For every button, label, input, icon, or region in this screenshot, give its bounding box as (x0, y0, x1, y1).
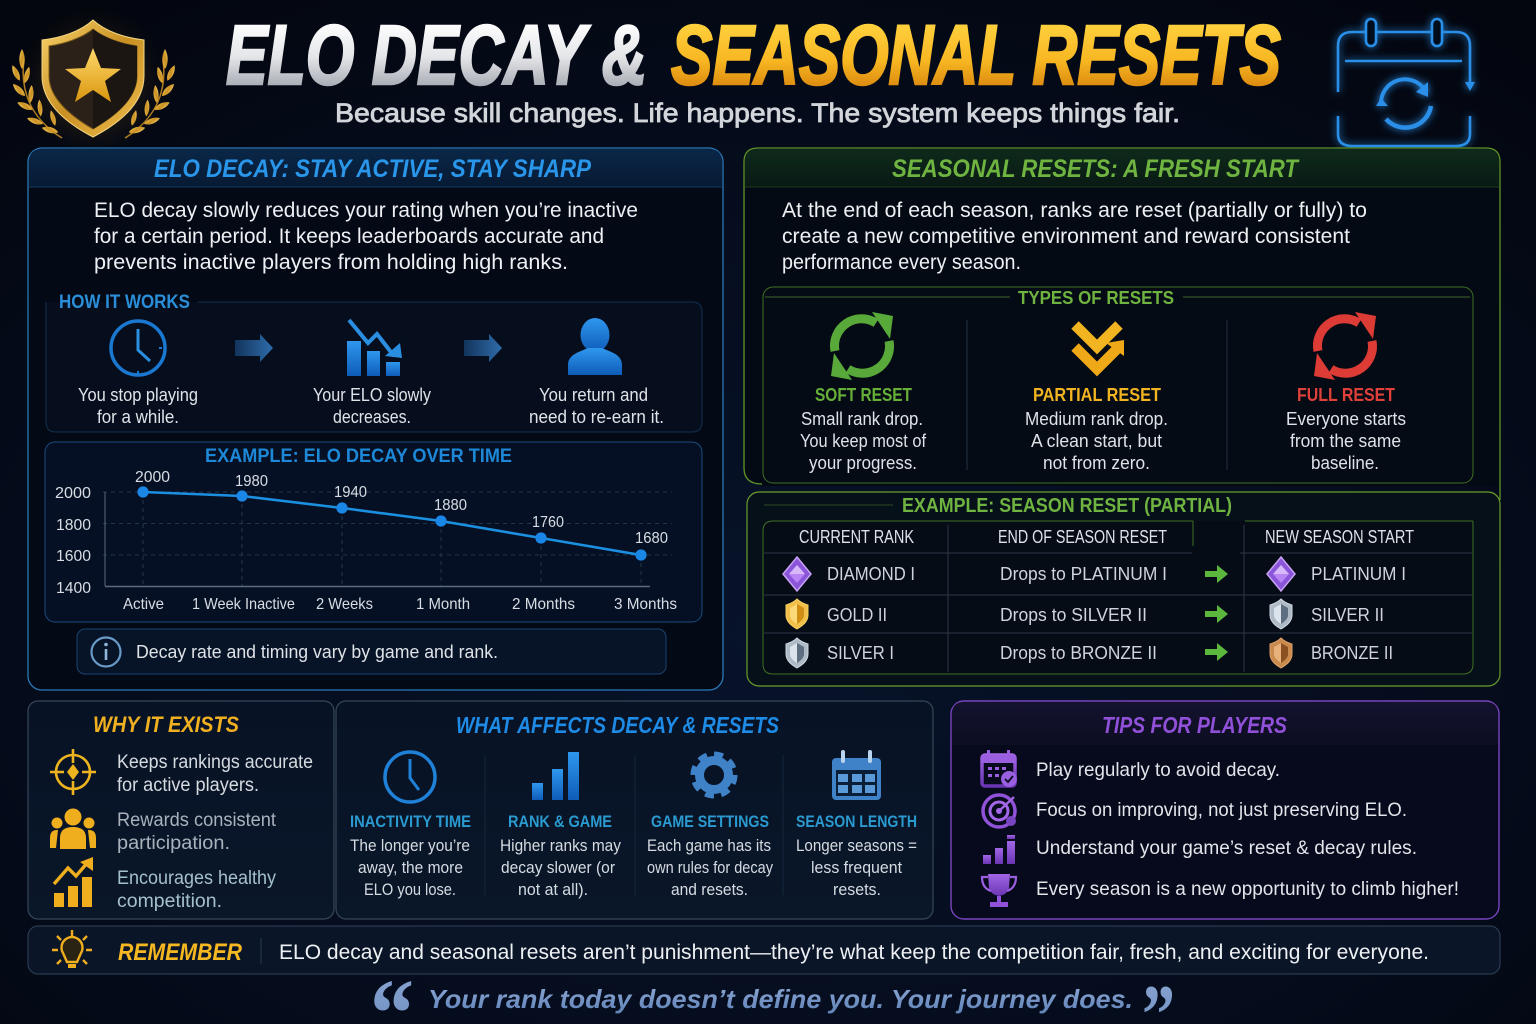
x axis labels: Active (123, 596, 164, 613)
row: gold (786, 599, 1384, 629)
step 2 text (313, 385, 431, 427)
panel: tips for players (951, 701, 1499, 919)
box: example season reset (747, 492, 1500, 686)
icon: partial reset (1075, 325, 1124, 369)
icon: info (92, 638, 120, 666)
icon: declining bars (347, 320, 402, 376)
factor: rank and game: decay slower (or (501, 858, 615, 877)
data labels: 1940 (334, 484, 367, 501)
soft reset text: You keep most of (800, 431, 927, 451)
row: silver: Drops to BRONZE II (1000, 642, 1157, 663)
reset table (763, 521, 1473, 674)
factor: game settings: own rules for decay (647, 858, 773, 877)
y axis labels: 2000 (55, 485, 91, 502)
icon: target (50, 749, 96, 795)
y axis labels: 1400 (56, 580, 91, 597)
factor: inactivity time (350, 752, 471, 899)
icon: light bulb (52, 930, 92, 968)
row: gold: GOLD II (827, 604, 887, 625)
arrow: step 2 to 3 (464, 334, 502, 362)
partial reset text (1025, 385, 1168, 473)
partial reset text: Medium rank drop. (1025, 409, 1168, 429)
data labels (135, 469, 668, 547)
reason 2 text: Rewards consistent (117, 810, 277, 831)
soft reset text: Small rank drop. (801, 409, 923, 429)
full reset text: from the same (1290, 431, 1401, 451)
soft reset text: your progress. (809, 453, 917, 473)
intro text: elo decay: ELO decay slowly reduces your rating when you’re inactive (94, 199, 638, 222)
heading: why it exists: WHY IT EXISTS (93, 712, 239, 737)
x axis labels: 2 Weeks (316, 596, 373, 613)
reason 2 text: participation. (117, 833, 230, 854)
factor: season length: less frequent (811, 858, 902, 877)
reason 2 text (117, 810, 277, 854)
panel: why it exists (28, 701, 334, 919)
factor: game settings: Each game has its (647, 836, 771, 855)
icon: person (568, 318, 622, 375)
title: SEASONAL RESETS (671, 8, 1281, 102)
full reset text: FULL RESET (1297, 385, 1395, 405)
box: types of resets (763, 287, 1473, 483)
decay line (137, 486, 647, 561)
tip 2: Focus on improving, not just preserving ELO. (1036, 799, 1407, 821)
soft reset text: SOFT RESET (815, 385, 912, 405)
x axis labels: 1 Week Inactive (192, 596, 295, 613)
step 3 text: need to re-earn it. (529, 407, 664, 427)
icon: people (50, 808, 96, 849)
full reset text (1286, 385, 1406, 473)
remember label: REMEMBER (118, 939, 243, 966)
factor: game settings (647, 755, 773, 899)
heading: what affects: WHAT AFFECTS DECAY & RESETS (456, 712, 780, 738)
data labels: 1680 (635, 530, 668, 547)
factor: inactivity time: INACTIVITY TIME (350, 812, 471, 831)
factor: inactivity time: away, the more (358, 858, 463, 877)
table header (799, 527, 1414, 547)
x axis labels: 1 Month (416, 596, 470, 613)
heading: how it works: HOW IT WORKS (59, 292, 190, 313)
chart: elo decay over time (45, 442, 702, 622)
soft reset text (800, 385, 927, 473)
factor: inactivity time: The longer you’re (350, 836, 470, 855)
factor: season length: SEASON LENGTH (796, 812, 917, 831)
x axis labels: 3 Months (614, 596, 677, 613)
note: decay rate (77, 629, 666, 674)
emblem: gold shield with laurel (10, 20, 177, 138)
step 1 text: for a while. (97, 407, 179, 427)
step 1 text (78, 385, 198, 427)
y axis labels: 1600 (56, 548, 91, 565)
step 3 text (529, 385, 664, 427)
reason 3 text: competition. (117, 891, 222, 912)
heading: types of resets: TYPES OF RESETS (1018, 288, 1174, 308)
panel header: seasonal resets: SEASONAL RESETS: A FRESH START (892, 155, 1300, 183)
panel header: elo decay (29, 149, 722, 187)
panel header: tips: TIPS FOR PLAYERS (1102, 712, 1288, 738)
full reset text: Everyone starts (1286, 409, 1406, 429)
partial reset text: A clean start, but (1031, 431, 1162, 451)
y axis labels: 1800 (56, 517, 91, 534)
panel header: tips (952, 702, 1498, 745)
x axis labels: 2 Months (512, 596, 575, 613)
row: diamond (783, 557, 1406, 591)
factor: rank and game: not at all). (518, 880, 588, 899)
icon: full reset (1314, 312, 1376, 380)
intro text: seasonal resets (782, 199, 1367, 274)
table header: END OF SEASON RESET (998, 527, 1167, 547)
heading: example season reset: EXAMPLE: SEASON RESET (PARTIAL) (902, 495, 1232, 517)
factor: rank and game (500, 752, 621, 899)
row: silver: SILVER I (827, 642, 894, 663)
intro text: elo decay: prevents inactive players from holding high ranks. (94, 251, 568, 274)
row: diamond: Drops to PLATINUM I (1000, 563, 1167, 584)
intro text: seasonal resets: create a new competitive environment and reward consistent (782, 225, 1350, 248)
panel: seasonal resets (744, 148, 1500, 686)
data labels: 1760 (532, 514, 564, 531)
partial reset text: not from zero. (1043, 453, 1150, 473)
closing quote (370, 960, 1175, 1024)
icon: growth chart (54, 857, 93, 907)
row: diamond: PLATINUM I (1311, 563, 1406, 584)
tip 3: Understand your game’s reset & decay rules. (1036, 837, 1417, 859)
row: diamond: DIAMOND I (827, 563, 915, 584)
how it works box (46, 292, 702, 432)
panel header: seasonal resets (745, 149, 1499, 187)
factor: rank and game: RANK & GAME (508, 812, 612, 831)
reason 3 text (117, 868, 276, 912)
factor: season length: Longer seasons = (796, 836, 917, 855)
table header: NEW SEASON START (1265, 527, 1414, 547)
icon: soft reset (831, 312, 893, 380)
remember bar (28, 926, 1500, 974)
subtitle: Because skill changes. Life happens. The system keeps things fair. (335, 98, 1180, 128)
step 3 text: You return and (539, 385, 648, 405)
panel: what affects decay and resets (336, 701, 933, 919)
intro text: elo decay (94, 199, 638, 274)
reason 3 text: Encourages healthy (117, 868, 276, 889)
step 2 text: Your ELO slowly (313, 385, 431, 405)
tip 3 (983, 835, 1417, 864)
icon: clock (111, 321, 165, 375)
remember message: ELO decay and seasonal resets aren’t punishment—they’re what keep the competition fair, fresh, and exciting for everyone. (279, 941, 1429, 964)
step 1 text: You stop playing (78, 385, 198, 405)
factor: inactivity time: ELO you lose. (364, 880, 456, 899)
arrow: step 1 to 2 (235, 334, 273, 362)
full reset text: baseline. (1311, 453, 1379, 473)
tip 4: Every season is a new opportunity to climb higher! (1036, 878, 1459, 900)
title: ELO DECAY & (226, 8, 647, 102)
panel header: elo decay: ELO DECAY: STAY ACTIVE, STAY SHARP (154, 155, 591, 183)
factor: rank and game: Higher ranks may (500, 836, 621, 855)
row: silver: BRONZE II (1311, 642, 1393, 663)
reason 1 text (117, 752, 313, 796)
factor: season length: resets. (833, 880, 881, 899)
closing quote: Your rank today doesn’t define you. Your journey does. (428, 984, 1133, 1014)
panel: elo decay (28, 148, 723, 690)
x axis labels (123, 596, 677, 613)
tip 1: Play regularly to avoid decay. (1036, 759, 1280, 781)
row: gold: SILVER II (1311, 604, 1384, 625)
table header: CURRENT RANK (799, 527, 914, 547)
row: silver (786, 638, 1393, 668)
tip 1 (982, 750, 1280, 787)
data labels: 2000 (135, 469, 170, 486)
y axis labels (55, 485, 91, 597)
factor: season length (796, 750, 917, 899)
chart title: EXAMPLE: ELO DECAY OVER TIME (205, 446, 512, 467)
tip 4 (982, 874, 1459, 907)
partial reset text: PARTIAL RESET (1033, 385, 1161, 405)
icon: calendar with reset arrows (1338, 19, 1475, 146)
title (226, 8, 1281, 102)
reason 1 text: Keeps rankings accurate (117, 752, 313, 773)
reason 1 text: for active players. (117, 775, 259, 796)
intro text: seasonal resets: At the end of each season, ranks are reset (partially or fully) to (782, 199, 1367, 222)
factor: game settings: GAME SETTINGS (651, 812, 769, 831)
step 2 text: decreases. (333, 407, 411, 427)
note: decay rate: Decay rate and timing vary by game and rank. (136, 642, 498, 662)
factor: game settings: and resets. (671, 880, 748, 899)
intro text: seasonal resets: performance every season. (782, 251, 1021, 274)
data labels: 1880 (434, 497, 467, 514)
intro text: elo decay: for a certain period. It keeps leaderboards accurate and (94, 225, 604, 248)
data labels: 1980 (235, 473, 268, 490)
tip 2 (983, 795, 1407, 827)
row: gold: Drops to SILVER II (1000, 604, 1147, 625)
